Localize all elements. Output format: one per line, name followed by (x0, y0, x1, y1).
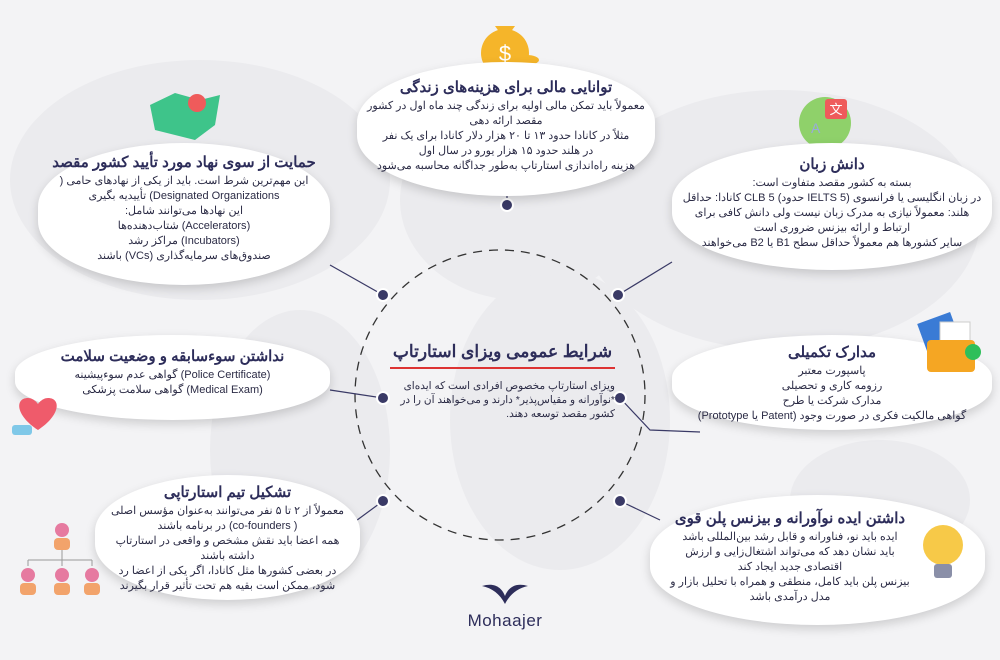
panel: idea: باید نشان دهد که می‌تواند اشتغال‌زایی و ارزش اقتصادی جدید ایجاد کند (685, 546, 895, 573)
panel: language: سایر کشورها هم معمولاً حداقل سطح B1 یا B2 می‌خواهند (702, 237, 962, 249)
panel: financial: معمولاً باید تمکن مالی اولیه برای زندگی چند ماه اول در کشور مقصد ارائه دهی (367, 100, 645, 127)
panel: idea: ایده باید نو، فناورانه و قابل رشد بین‌المللی باشد (682, 531, 898, 543)
panel: documents: مدارک تکمیلی (788, 344, 876, 361)
icon: money bag (481, 26, 539, 66)
center title block: شرایط عمومی ویزای استارتاپ (393, 342, 612, 361)
logo: Mohaajer (468, 611, 542, 630)
icon: health (12, 398, 57, 435)
icon: team (20, 523, 100, 595)
panel: documents: رزومه کاری و تحصیلی (782, 380, 882, 392)
panel: clean record: نداشتن سوءسابقه و وضعیت سلامت (61, 348, 284, 365)
center title block (390, 342, 615, 420)
panel: financial: مثلاً در کانادا حدود ۱۳ تا ۲۰ هزار دلار کانادا برای یک نفر (383, 130, 629, 142)
panel: team: در بعضی کشورها مثل کانادا، اگر یکی از اعضا رد شود، ممکن است بقیه هم تحت تأثیر قرار بگیرند (119, 565, 336, 592)
panel: financial: توانایی مالی برای هزینه‌های زندگی (400, 79, 612, 96)
icon: map (150, 93, 220, 140)
panel: support: (Incubators) مراکز رشد (128, 235, 240, 247)
panel: team (95, 475, 360, 600)
panel: documents: گواهی مالکیت فکری در صورت وجود (Patent یا Prototype) (698, 410, 966, 422)
logo (468, 584, 542, 630)
panel: language: بسته به کشور مقصد متفاوت است: (752, 177, 912, 189)
icon: folder (917, 312, 981, 372)
panel: idea (650, 495, 985, 625)
icon: language (799, 97, 851, 144)
panel: clean record: (Medical Exam) گواهی سلامت پزشکی (82, 384, 263, 396)
panel: financial (357, 62, 655, 196)
icon: bulb (923, 525, 963, 578)
panel: documents: پاسپورت معتبر (798, 365, 866, 377)
panel: support (38, 143, 330, 285)
panel: language: دانش زبان (799, 156, 865, 173)
panel: support: (Accelerators) شتاب‌دهنده‌ها (118, 220, 250, 232)
panel: documents: مدارک شرکت یا طرح (783, 395, 881, 407)
icon: language: 文 (829, 102, 843, 117)
panel: idea: بیزنس پلن باید کامل، منطقی و همراه با تحلیل بازار و مدل درآمدی باشد (670, 576, 910, 603)
panel: language (672, 143, 992, 270)
panel: team: همه اعضا باید نقش مشخص و واقعی در استارتاپ داشته باشند (116, 535, 339, 562)
panel: documents (672, 335, 992, 430)
panel: support: این نهادها می‌توانند شامل: (125, 205, 243, 217)
panel: language: هلند: معمولاً نیازی به مدرک زبان نیست ولی دانش کافی برای ارتباط و ارائه بیزنس ضروری است (695, 207, 969, 234)
panel: team: تشکیل تیم استارتاپی (164, 484, 291, 501)
icon: money bag: $ (499, 41, 511, 66)
icon: language: A (811, 120, 821, 136)
panel: support: این مهم‌ترین شرط است. باید از یکی از نهادهای حامی ( Designated Organizations) تأییدیه بگیری (60, 175, 308, 202)
panel: clean record: (Police Certificate) گواهی عدم سوءپیشینه (75, 369, 270, 381)
panel: financial: در هلند حدود ۱۵ هزار یورو در سال اول (419, 145, 593, 157)
panel: financial: هزینه راه‌اندازی استارتاپ به‌طور جداگانه محاسبه می‌شود (377, 160, 635, 172)
panel: support: حمایت از سوی نهاد مورد تأیید کشور مقصد (52, 154, 316, 171)
panel: clean record (15, 335, 330, 420)
panel: language: در زبان انگلیسی یا فرانسوی (IELTS 5 حدود) CLB 5 کانادا: حداقل (683, 192, 981, 204)
panel: team: معمولاً از ۲ تا ۵ نفر می‌توانند به‌عنوان مؤسس اصلی ( co-founders) در برنامه باشند (111, 505, 344, 532)
center title block: ویزای استارتاپ مخصوص افرادی است که ایده‌ای *نوآورانه و مقیاس‌پذیر* دارند و می‌خواهند آن را در کشور مقصد توسعه دهند. (400, 380, 615, 420)
panel: support: صندوق‌های سرمایه‌گذاری (VCs) باشند (97, 250, 271, 262)
panel: idea: داشتن ایده نوآورانه و بیزنس پلن قوی (675, 510, 905, 527)
